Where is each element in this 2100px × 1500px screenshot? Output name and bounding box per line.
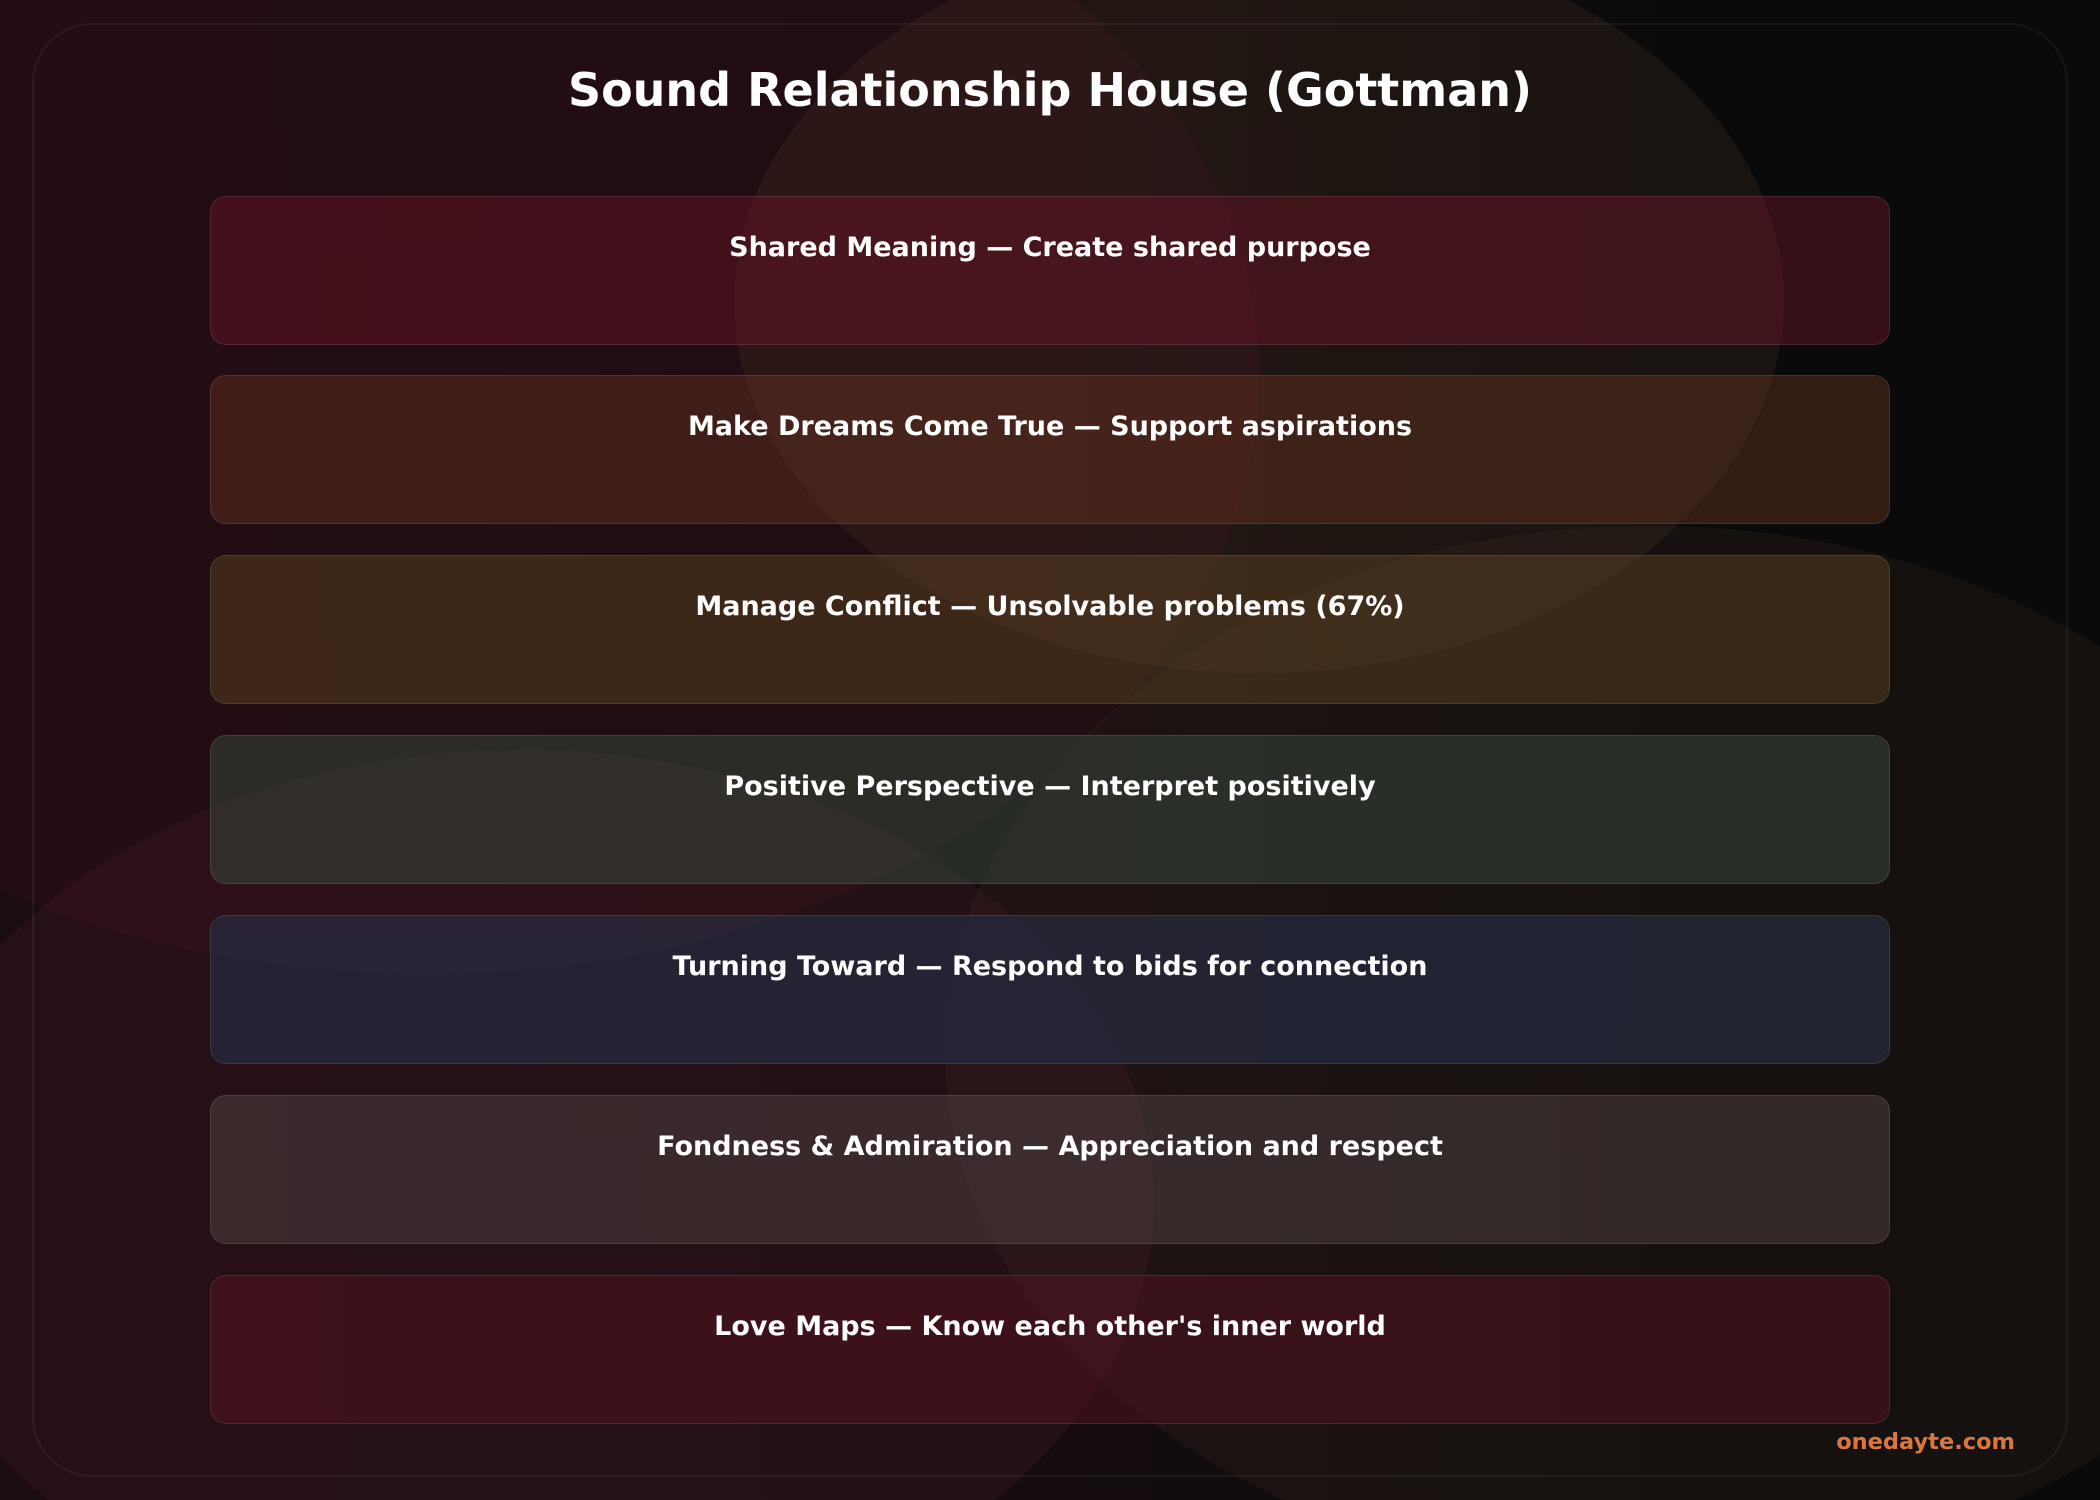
bar: positive perspective: Positive Perspective — Interpret positively: [724, 771, 1376, 802]
footer brand: onedayte.com: [1836, 1429, 2015, 1455]
bar: shared meaning: [210, 196, 1890, 345]
title: Sound Relationship House (Gottman): [568, 63, 1532, 117]
bar: make dreams come true: Make Dreams Come True — Support aspirations: [688, 411, 1412, 442]
bar: love maps: [210, 1275, 1890, 1424]
bar: turning toward: [210, 915, 1890, 1064]
bar: fondness: Fondness & Admiration — Appreciation and respect: [657, 1131, 1443, 1162]
bar: turning toward: Turning Toward — Respond to bids for connection: [673, 951, 1427, 982]
bar: positive perspective: [210, 735, 1890, 884]
bar: fondness: [210, 1095, 1890, 1244]
bar: shared meaning: Shared Meaning — Create shared purpose: [729, 232, 1371, 263]
bar: make dreams come true: [210, 375, 1890, 524]
bar: manage conflict: Manage Conflict — Unsolvable problems (67%): [695, 591, 1405, 622]
bar: manage conflict: [210, 555, 1890, 704]
bar: love maps: Love Maps — Know each other's inner world: [714, 1311, 1386, 1342]
